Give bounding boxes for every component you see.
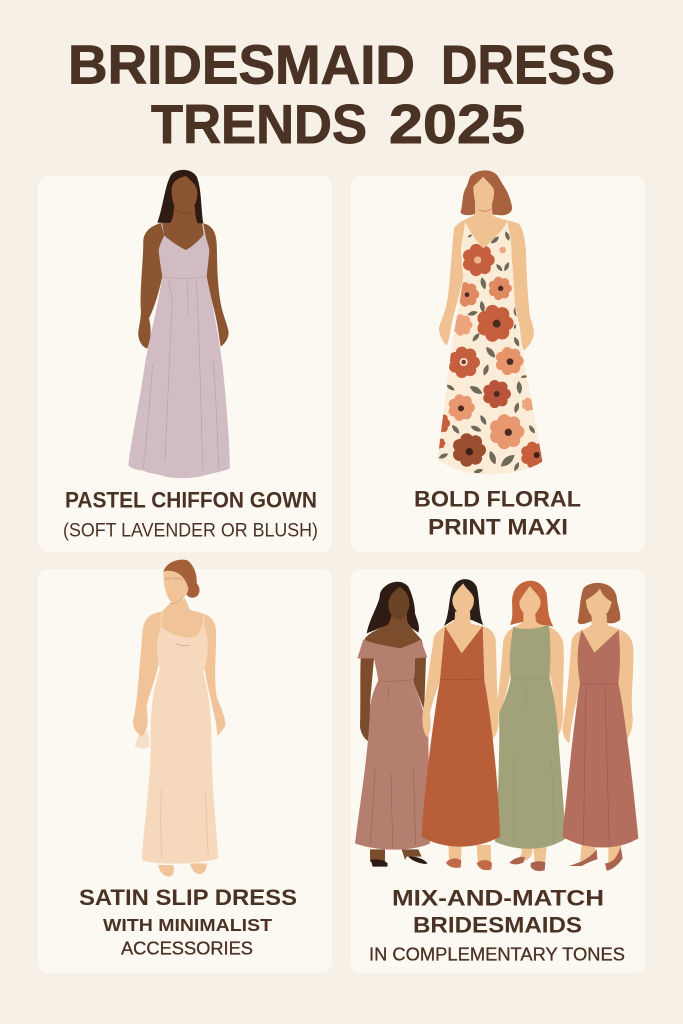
figure: woman in floral maxi	[438, 170, 542, 474]
figure: off-shoulder rose dress	[355, 582, 430, 867]
card background	[351, 176, 645, 552]
subheading	[103, 915, 272, 958]
figure: woman in satin slip dress	[133, 560, 225, 877]
figure group: four bridesmaids	[355, 579, 638, 871]
heading	[414, 487, 581, 540]
heading	[392, 886, 604, 938]
subheading: (SOFT LAVENDER OR BLUSH)	[63, 520, 318, 542]
heading: SATIN SLIP DRESS	[79, 885, 297, 910]
heading: BOLD FLORAL	[414, 487, 581, 512]
title	[68, 34, 615, 155]
subheading: WITH MINIMALIST	[103, 915, 272, 935]
title: 2025	[389, 93, 525, 155]
subheading: IN COMPLEMENTARY TONES	[369, 945, 625, 965]
panel: mix-and-match bridesmaids	[351, 569, 645, 973]
card background	[38, 176, 332, 552]
figure: terracotta v-neck dress	[422, 579, 500, 870]
heading: PRINT MAXI	[428, 514, 568, 540]
title: DRESS	[441, 34, 615, 96]
heading: PASTEL CHIFFON GOWN	[65, 488, 317, 512]
subheading: ACCESSORIES	[121, 938, 253, 958]
panel: pastel chiffon gown	[38, 170, 332, 552]
heading: BRIDESMAIDS	[413, 913, 582, 938]
card background	[38, 569, 332, 973]
card background	[351, 569, 645, 973]
figure: woman in lavender gown	[128, 170, 230, 478]
figure: sage green sleeveless dress	[495, 581, 566, 871]
heading: MIX-AND-MATCH	[392, 886, 604, 910]
figure: dusty rose v-neck dress	[562, 583, 638, 871]
title: TRENDS	[151, 93, 367, 155]
title: BRIDESMAID	[68, 34, 415, 96]
panel: bold floral print maxi	[351, 170, 645, 552]
panel: satin slip dress	[38, 560, 332, 973]
